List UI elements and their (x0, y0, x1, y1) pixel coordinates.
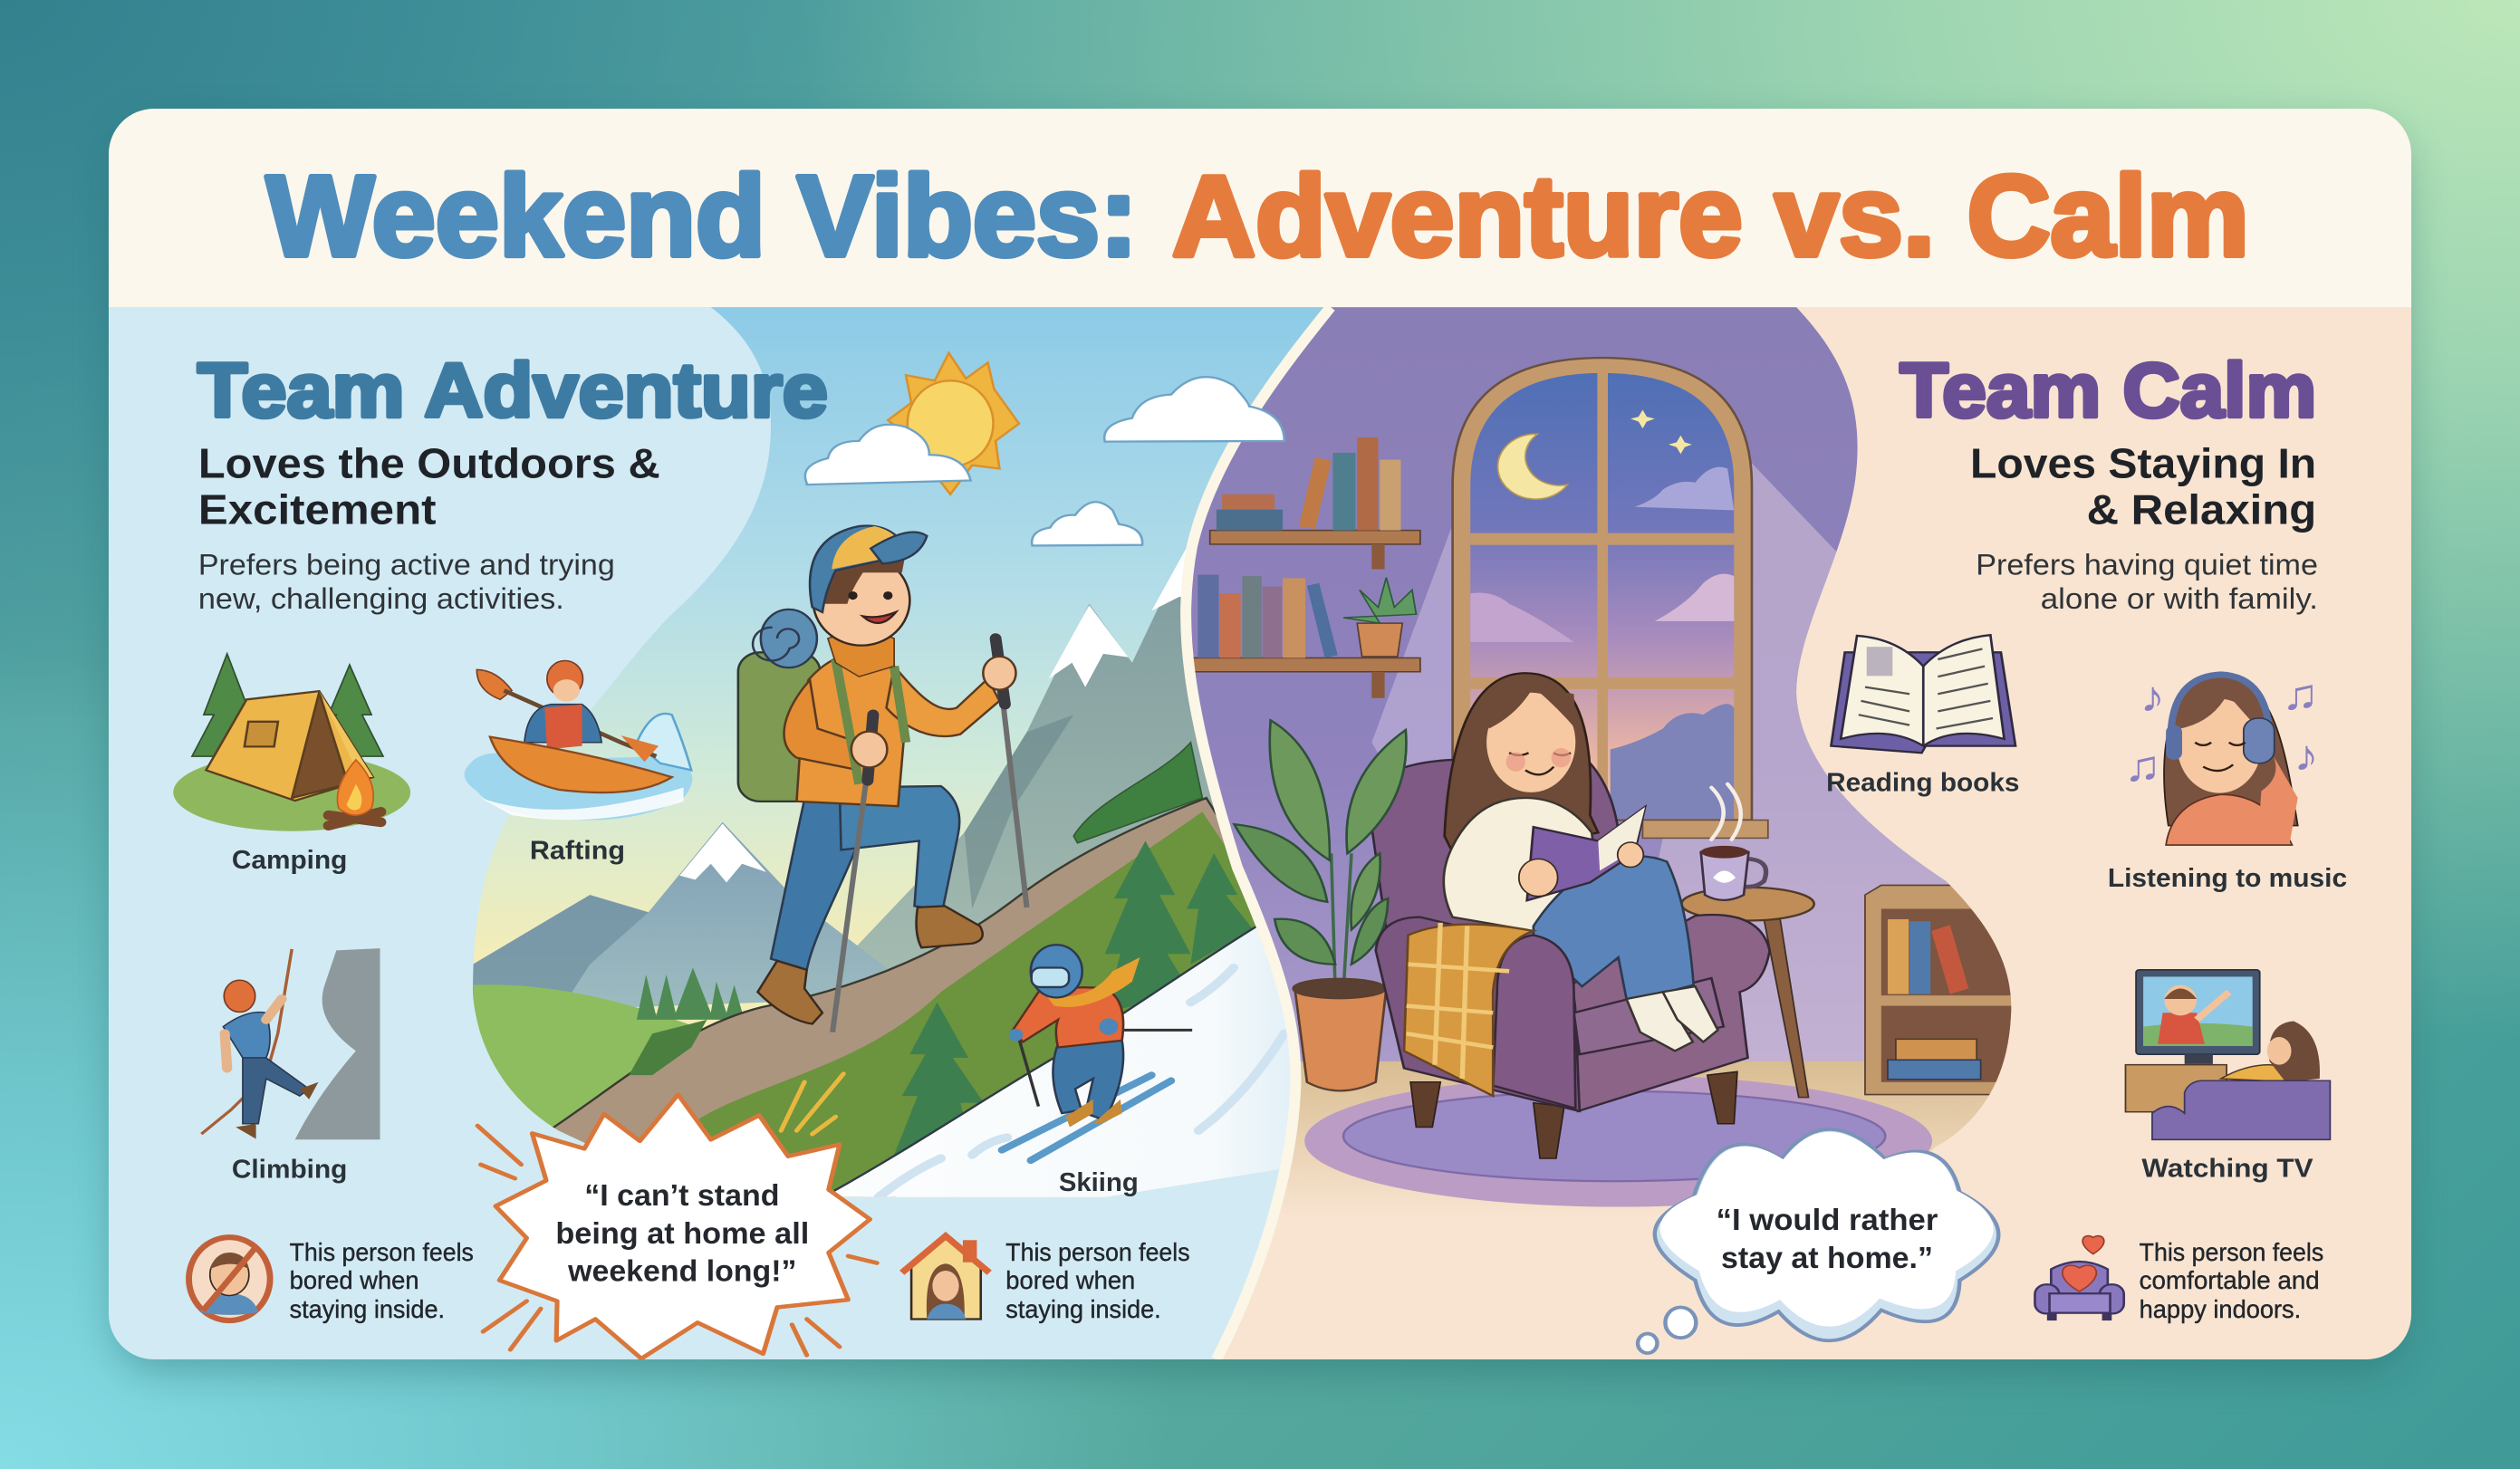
window (1453, 358, 1768, 838)
thought bubble (1638, 1129, 1998, 1353)
text: bored note: staying inside. (290, 1296, 445, 1324)
thought bubble: stay at home.” (1721, 1241, 1933, 1274)
stars (1630, 409, 1692, 454)
speech burst: being at home all (555, 1216, 809, 1251)
icon: no staying in (189, 1237, 270, 1320)
reading woman (1444, 673, 1717, 1051)
icon: open book (1831, 635, 2015, 753)
wall (1161, 299, 2051, 1068)
skier (1002, 945, 1192, 1160)
music notes: ♫ (2124, 742, 2161, 790)
plant (1235, 720, 1406, 1090)
snow slope (833, 926, 1290, 1197)
title: Adventure vs. Calm (1172, 152, 2249, 280)
icon: house (902, 1236, 989, 1320)
text: comfortable note: happy indoors. (2140, 1296, 2301, 1323)
curved divider (1186, 307, 1331, 1359)
subheading: outdoors: Excitement (198, 487, 437, 533)
body text: calm: alone or with family. (2041, 583, 2318, 615)
bookcase (1865, 885, 2034, 1095)
mug (1701, 784, 1766, 900)
speech burst (477, 1074, 877, 1359)
music notes: ♫ (2282, 670, 2319, 718)
icon: sofa with hearts (2034, 1236, 2124, 1320)
text: bored note: bored when (290, 1266, 419, 1294)
subheading: staying in: Loves Staying In (1970, 440, 2316, 487)
icon: climber (201, 948, 380, 1139)
label: Skiing: Skiing (1059, 1167, 1139, 1197)
label: Rafting: Rafting (530, 835, 625, 865)
shelves (1189, 437, 1420, 698)
text: comfortable note: comfortable and (2140, 1267, 2320, 1294)
hiker (738, 525, 1027, 1032)
icon: watching tv (2125, 970, 2330, 1139)
window light (1614, 455, 2019, 1068)
title: Weekend Vibes: (266, 152, 1138, 280)
label: Watching TV: Watching TV (2141, 1153, 2313, 1183)
mountains (473, 531, 1308, 1013)
rug (1304, 1075, 1932, 1207)
music notes: ♪ (2140, 672, 2165, 720)
label: Reading books: Reading books (1826, 767, 2020, 797)
body text: calm: Prefers having quiet time (1976, 549, 2318, 581)
subheading: staying in: & Relaxing (2087, 486, 2316, 533)
text: comfortable note: This person feels (2140, 1239, 2323, 1267)
speech burst: “I can’t stand (584, 1178, 780, 1213)
music notes (2124, 670, 2319, 790)
thought bubble: “I would rather (1717, 1202, 1938, 1236)
music notes: ♪ (2294, 731, 2319, 780)
heading: team adventure: Team Adventure (197, 348, 828, 433)
label: Listening to music: Listening to music (2108, 862, 2347, 892)
text: bored note two: staying inside. (1005, 1296, 1161, 1324)
hiker poles (830, 708, 1029, 1032)
label: Climbing: Climbing (232, 1154, 347, 1184)
sky (473, 307, 1324, 1197)
side table (1681, 888, 1814, 1098)
title (266, 152, 2249, 280)
campfire (329, 760, 380, 826)
icon: headphones girl (2124, 670, 2319, 845)
subheading: outdoors: Loves the Outdoors & (198, 441, 660, 487)
icon: tent (173, 654, 410, 831)
body text: adventure: new, challenging activities. (198, 583, 564, 616)
icon: kayak rafting (465, 660, 692, 821)
hiker jacket (796, 648, 903, 806)
hills (473, 743, 1284, 1214)
panel: team calm background (1186, 307, 2411, 1359)
text: bored note two: bored when (1005, 1266, 1135, 1294)
illustration: calm scene (1161, 299, 2347, 1353)
hiker head (828, 631, 894, 677)
icon: cloud by sun (805, 425, 971, 485)
panel: header band (109, 109, 2411, 308)
illustration: adventure scene (173, 299, 1378, 1359)
floor (1161, 1061, 2051, 1214)
speech burst: weekend long!” (567, 1253, 796, 1288)
icon: small cloud (1032, 502, 1142, 545)
armchair front arm (1493, 936, 1575, 1109)
armchair (1376, 915, 1770, 1158)
backpack (738, 652, 820, 802)
hiker legs (770, 802, 854, 971)
armchair back (1368, 760, 1634, 999)
label: Camping: Camping (232, 845, 347, 875)
text: bored note: This person feels (290, 1239, 474, 1267)
panel: team adventure background (109, 307, 1331, 1359)
plaid blanket (1404, 923, 1534, 1096)
heading: team calm: Team Calm (1900, 349, 2316, 434)
text: bored note two: This person feels (1005, 1239, 1190, 1267)
card (109, 109, 2411, 1359)
card shadow (113, 127, 2407, 1372)
icon: sun (888, 353, 1019, 494)
moon (1497, 434, 1567, 499)
body text: adventure: Prefers being active and trying (198, 549, 615, 581)
icon: upper right cloud (1104, 377, 1284, 442)
